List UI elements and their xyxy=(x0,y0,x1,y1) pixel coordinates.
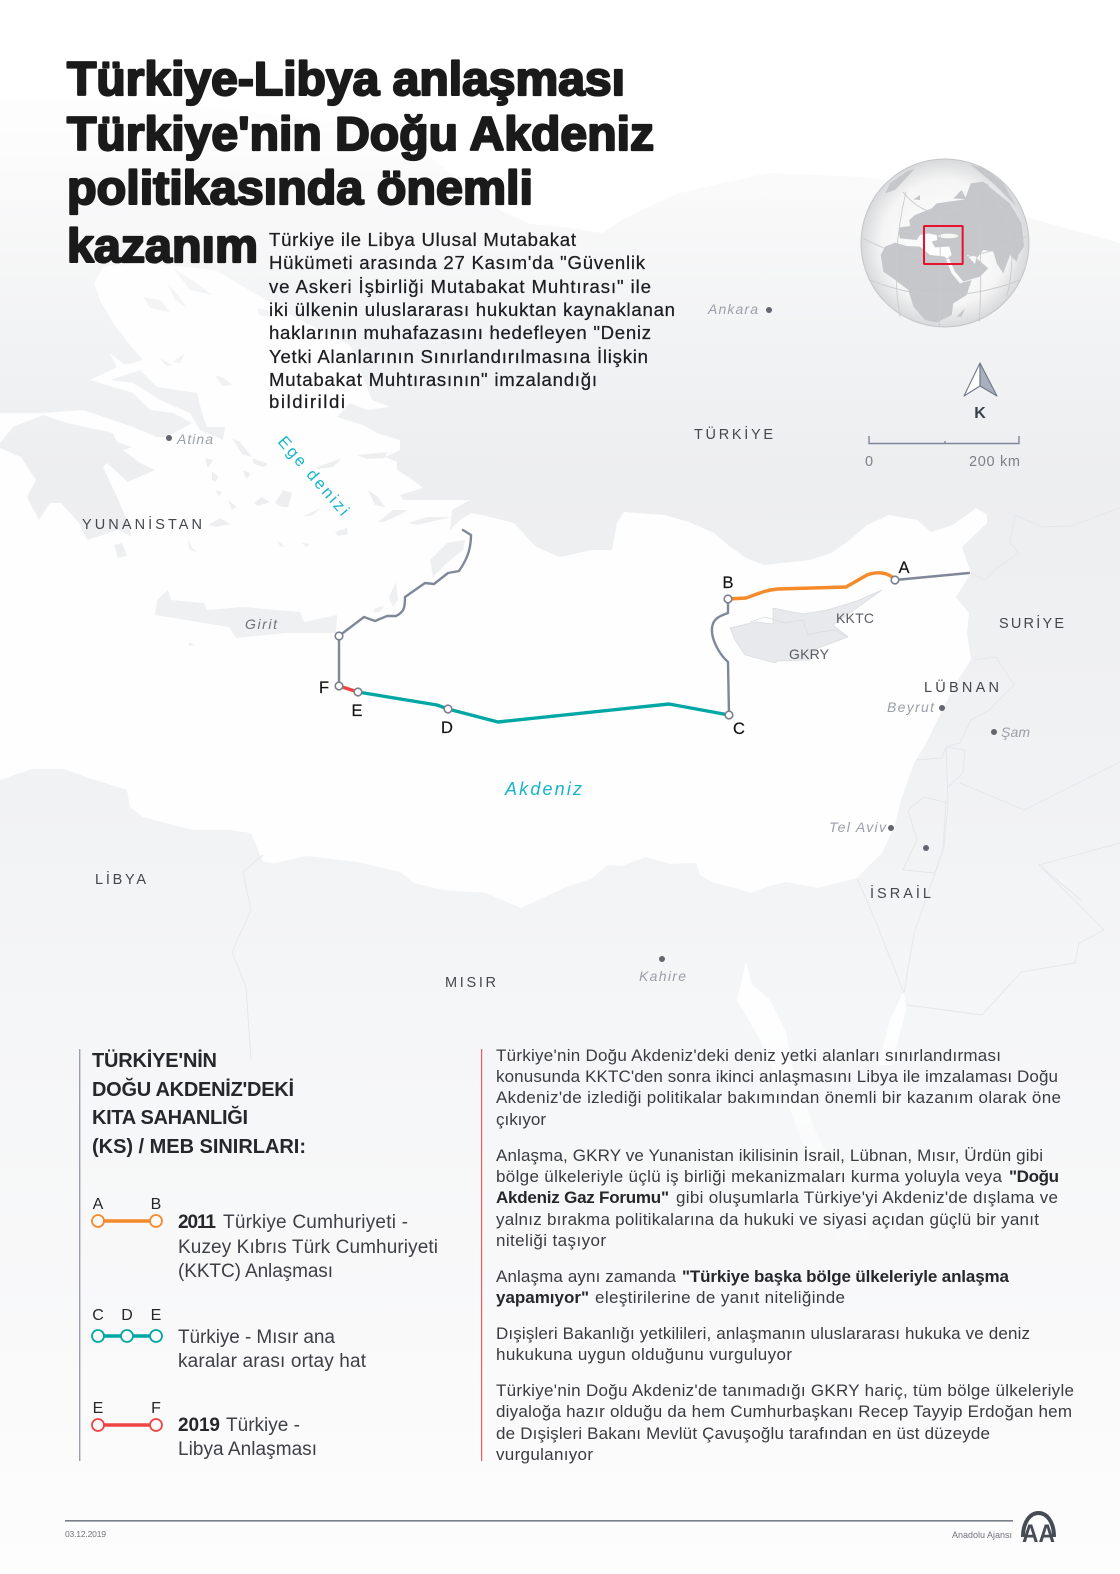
paragraph 4: hukukuna uygun olduğunu vurguluyor xyxy=(496,1345,792,1364)
paragraph 5 xyxy=(496,1381,1074,1464)
legend item: A-B: 2011 xyxy=(178,1212,216,1233)
country labels: TÜRKİYE xyxy=(694,425,773,443)
title: Türkiye'nin Doğu Akdeniz xyxy=(67,107,654,160)
panel: legend xyxy=(79,1049,438,1461)
intro text: bildirildi xyxy=(269,391,345,412)
paragraph 2 xyxy=(496,1146,1059,1250)
panel: article text xyxy=(481,1046,1074,1464)
paragraph 3: eleştirilerine de yanıt niteliğinde xyxy=(595,1288,845,1307)
country labels: GKRY xyxy=(789,646,830,662)
land: Cyprus xyxy=(730,590,882,663)
paragraph 1 xyxy=(496,1046,1061,1129)
land: Greece and islands xyxy=(0,268,465,646)
legend item: E-F: F xyxy=(151,1400,161,1417)
paragraph 1: Akdeniz'de izlediği politikalar bakımından önemli bir kazanım olarak öne xyxy=(496,1088,1061,1107)
label: Ege denizi: Ege denizi xyxy=(274,433,353,519)
legend item: E-F: Libya Anlaşması xyxy=(178,1439,317,1460)
legend item: A-B: Türkiye Cumhuriyeti - xyxy=(223,1212,408,1233)
paragraph 2: Akdeniz Gaz Forumu" xyxy=(496,1188,669,1207)
city labels and markers xyxy=(166,301,1030,984)
north arrow xyxy=(964,363,997,422)
label: Akdeniz: Akdeniz xyxy=(504,779,582,799)
map nodes and route letters: A xyxy=(898,559,910,577)
map nodes and route letters: E xyxy=(351,702,363,720)
Gulf of Suez, Gulf of Aqaba and Red Sea xyxy=(737,962,870,1240)
intro text: ve Askeri İşbirliği Mutabakat Muhtırası" ile xyxy=(269,276,651,297)
paragraph 3: Anlaşma aynı zamanda xyxy=(496,1267,677,1286)
intro text: Türkiye ile Libya Ulusal Mutabakat xyxy=(269,229,577,250)
legend item: A-B: B xyxy=(151,1196,161,1213)
country labels: LÜBNAN xyxy=(924,678,999,696)
paragraph 5: vurgulanıyor xyxy=(496,1445,593,1464)
country labels xyxy=(82,425,1064,991)
intro text xyxy=(269,229,675,412)
paragraph 3: yapamıyor" xyxy=(496,1288,589,1307)
intro text: Mutabakat Muhtırasının" imzalandığı xyxy=(269,369,597,390)
legend item: E-F: 2019 xyxy=(178,1415,220,1436)
legend item: E-F: E xyxy=(93,1400,103,1417)
grey boundary segments xyxy=(339,530,969,715)
legend item: C-D-E xyxy=(92,1307,367,1372)
country labels: MISIR xyxy=(445,975,496,991)
city labels and markers: Şam xyxy=(1001,724,1030,740)
country labels: LİBYA xyxy=(95,870,146,888)
map nodes and route letters: C xyxy=(733,720,745,738)
intro text: iki ülkenin uluslararası hukuktan kaynaklanan xyxy=(269,299,675,320)
red line E-F xyxy=(339,686,358,692)
paragraph 2: bölge ülkeleriyle üçlü iş birliği mekanizmaları kurma yoluyla veya xyxy=(496,1167,1003,1186)
legend item: C-D-E: karalar arası ortay hat xyxy=(178,1351,367,1372)
scale bar: 200 km xyxy=(969,454,1020,470)
title: Türkiye-Libya anlaşması xyxy=(67,52,625,105)
footer: 03.12.2019 xyxy=(65,1529,106,1539)
legend item: C-D-E: C xyxy=(92,1307,104,1324)
legend item: A-B xyxy=(92,1196,438,1282)
country labels: İSRAİL xyxy=(870,884,931,902)
teal line C-D-E xyxy=(358,692,729,722)
city labels and markers: Atina xyxy=(176,431,213,447)
paragraph 1: konusunda KKTC'den sonra ikinci anlaşmasını Libya ile imzalaması Doğu xyxy=(496,1067,1058,1086)
paragraph 3: "Türkiye başka bölge ülkeleriyle anlaşma xyxy=(682,1267,1010,1286)
paragraph 1: Türkiye'nin Doğu Akdeniz'deki deniz yetki alanları sınırlandırması xyxy=(496,1046,1001,1065)
footer xyxy=(65,1513,1055,1548)
paragraph 2: gibi oluşumlarla Türkiye'yi Akdeniz'de dışlama ve xyxy=(676,1188,1058,1207)
city labels and markers: Ankara xyxy=(707,301,758,317)
legend item: E-F: Türkiye - xyxy=(226,1415,300,1436)
map nodes and route letters xyxy=(319,559,910,738)
city labels and markers: Girit xyxy=(245,616,278,632)
map nodes and route letters: B xyxy=(722,574,734,592)
country labels: SURİYE xyxy=(999,614,1064,632)
legend item: A-B: (KKTC) Anlaşması xyxy=(178,1261,333,1282)
legend heading: KITA SAHANLIĞI xyxy=(92,1105,248,1129)
intro text: Yetki Alanlarının Sınırlandırılmasına İlişkin xyxy=(269,346,648,367)
boundary lines on map xyxy=(339,530,969,722)
map nodes and route letters: D xyxy=(441,719,453,737)
globe locator xyxy=(861,159,1029,327)
legend item: A-B: Kuzey Kıbrıs Türk Cumhuriyeti xyxy=(178,1237,438,1258)
legend item: C-D-E: Türkiye - Mısır ana xyxy=(178,1327,335,1348)
paragraph 2: niteliği taşıyor xyxy=(496,1231,606,1250)
legend item: C-D-E: D xyxy=(121,1307,133,1324)
map nodes and route letters: F xyxy=(319,679,329,697)
city labels and markers: Kahire xyxy=(639,968,686,984)
country labels: YUNANİSTAN xyxy=(82,515,202,533)
city labels and markers: Beyrut xyxy=(887,699,935,715)
paragraph 5: de Dışişleri Bakanı Mevlüt Çavuşoğlu tarafından en üst düzeyde xyxy=(496,1424,990,1443)
red locator square xyxy=(924,226,963,264)
paragraph 4 xyxy=(496,1324,1030,1364)
paragraph 4: Dışişleri Bakanlığı yetkilileri, anlaşmanın uluslararası hukuka ve deniz xyxy=(496,1324,1030,1343)
legend heading: (KS) / MEB SINIRLARI: xyxy=(92,1136,306,1158)
city labels and markers: Tel Aviv xyxy=(829,819,887,835)
paragraph 3 xyxy=(496,1267,1010,1307)
north arrow: K xyxy=(974,405,986,422)
scale bar xyxy=(865,436,1020,470)
paragraph 2: "Doğu xyxy=(1009,1167,1059,1186)
orange line A-B xyxy=(728,573,892,599)
legend heading xyxy=(92,1049,306,1158)
legend item: C-D-E: E xyxy=(151,1307,161,1324)
country labels: KKTC xyxy=(836,610,874,626)
legend item: A-B: A xyxy=(93,1196,104,1213)
paragraph 5: diyaloğa hazır olduğu da hem Cumhurbaşkanı Recep Tayyip Erdoğan hem xyxy=(496,1402,1072,1421)
intro text: Hükümeti arasında 27 Kasım'da "Güvenlik xyxy=(269,252,646,273)
legend item: E-F xyxy=(92,1400,317,1460)
legend heading: DOĞU AKDENİZ'DEKİ xyxy=(92,1077,294,1101)
legend heading: TÜRKİYE'NİN xyxy=(92,1049,217,1072)
intro text: haklarının muhafazasını hedefleyen "Deniz xyxy=(269,322,651,343)
paragraph 1: çıkıyor xyxy=(496,1110,546,1129)
title: kazanım xyxy=(67,219,258,272)
footer: Anadolu Ajansı xyxy=(952,1530,1012,1540)
title xyxy=(67,52,654,272)
title: politikasında önemli xyxy=(67,161,533,214)
paragraph 2: Anlaşma, GKRY ve Yunanistan ikilisinin İsrail, Lübnan, Mısır, Ürdün gibi xyxy=(496,1146,1043,1165)
icon: Anadolu Agency logo: AA xyxy=(1022,1520,1055,1548)
paragraph 5: Türkiye'nin Doğu Akdeniz'de tanımadığı GKRY hariç, tüm bölge ülkeleriyle xyxy=(496,1381,1074,1400)
country borders xyxy=(232,508,1120,1060)
paragraph 2: yalnız bırakma politikalarına da hukuki ve siyasi açıdan güçlü bir yanıt xyxy=(496,1210,1039,1229)
scale bar: 0 xyxy=(865,454,873,470)
